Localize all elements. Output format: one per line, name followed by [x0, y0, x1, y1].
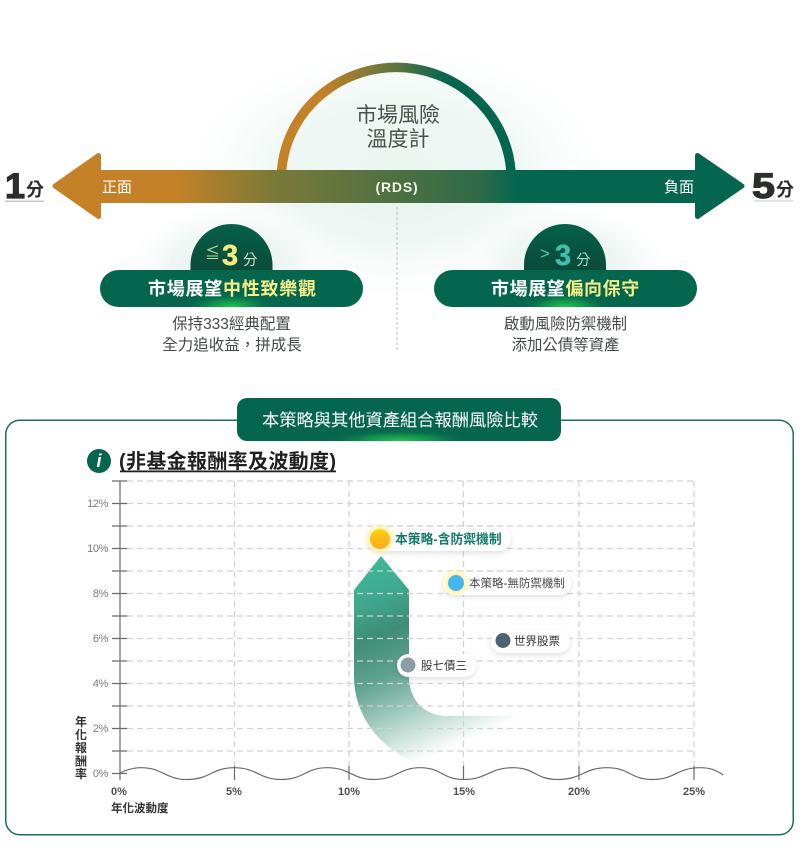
point: world equities: 世界股票 — [514, 635, 560, 648]
score: 1 point: 1 — [5, 167, 25, 206]
score: 1 point: 分 — [26, 180, 44, 200]
gauge title — [356, 104, 440, 151]
x axis labels — [111, 786, 705, 798]
x axis labels: 20% — [568, 786, 590, 798]
y axis title — [75, 714, 87, 781]
pill heading: 市場展望偏向保守 — [491, 278, 640, 299]
y axis title: 率 — [75, 766, 87, 781]
description: 添加公債等資產 — [512, 335, 619, 354]
y axis labels: 10% — [87, 543, 109, 555]
x axis wave — [120, 768, 723, 780]
gauge arc — [282, 67, 511, 172]
arrow label: positive: 正面 — [102, 179, 132, 196]
point: strategy with defense: 本策略-含防禦機制 — [395, 532, 502, 546]
y axis labels: 0% — [93, 768, 109, 780]
x axis ticks — [234, 766, 694, 780]
banner heading — [237, 398, 561, 441]
score: 5 points — [752, 167, 794, 206]
y axis labels — [87, 498, 109, 780]
panel: neutral to optimistic — [100, 224, 363, 354]
score dome: above 3: > — [540, 244, 550, 263]
arrow label: negative: 負面 — [664, 179, 694, 196]
point: strategy with defense — [363, 522, 511, 556]
center divider — [396, 207, 398, 352]
icon: info — [87, 449, 111, 473]
point: world equities — [491, 630, 570, 653]
icon: info: i — [96, 451, 102, 471]
x axis labels: 15% — [453, 786, 475, 798]
panel: comparison frame — [6, 420, 793, 835]
gauge title: 溫度計 — [366, 128, 430, 151]
chart heading: (非基金報酬率及波動度) — [119, 449, 336, 473]
big green curved arrow — [354, 556, 525, 772]
y axis labels: 8% — [93, 588, 109, 600]
score: 5 points: 分 — [776, 180, 794, 200]
background glow: gauge — [172, 37, 622, 307]
gauge title: 市場風險 — [356, 104, 440, 127]
y axis labels: 12% — [87, 498, 109, 510]
x axis labels: 25% — [683, 786, 705, 798]
y axis labels: 6% — [93, 633, 109, 645]
pill heading — [100, 270, 363, 307]
background glow: left outlook — [123, 203, 339, 327]
point: strategy without defense: 本策略-無防禦機制 — [469, 576, 565, 590]
pill heading — [434, 270, 697, 307]
score dome: above 3: 3 — [555, 240, 571, 272]
risk scale double arrow — [55, 156, 742, 216]
point: 70/30 stock bond — [397, 654, 476, 677]
panel: leaning conservative — [434, 224, 697, 354]
description: 啟動風險防禦機制 — [504, 315, 627, 333]
description: 保持333經典配置 — [172, 314, 291, 333]
y axis title: 報 — [75, 740, 87, 755]
background glow: right outlook — [457, 203, 673, 327]
point: strategy without defense — [441, 568, 571, 598]
description: 全力追收益，拼成長 — [162, 336, 302, 354]
score dome: at most 3: 分 — [243, 252, 258, 269]
y axis labels: 2% — [93, 723, 109, 735]
y axis labels: 4% — [93, 678, 109, 690]
point: 70/30 stock bond: 股七債三 — [421, 658, 467, 672]
description — [504, 315, 627, 354]
description — [162, 314, 302, 354]
arrow label: RDS: (RDS) — [376, 179, 418, 195]
score: 5 points: 5 — [752, 167, 775, 206]
x axis title: 年化波動度 — [111, 801, 169, 815]
x axis labels: 10% — [338, 786, 360, 798]
score dome: above 3: 分 — [576, 252, 591, 269]
y axis — [112, 481, 127, 780]
banner heading: 本策略與其他資產組合報酬風險比較 — [262, 410, 538, 430]
score dome: at most 3: ≦ — [205, 245, 220, 262]
score dome: at most 3: 3 — [222, 240, 238, 272]
score: 1 point — [5, 167, 44, 206]
scatter chart — [75, 481, 723, 815]
y axis title: 化 — [75, 727, 87, 742]
x axis labels: 5% — [226, 786, 242, 798]
score dome: above 3 — [524, 224, 606, 272]
y axis title: 酬 — [75, 754, 87, 768]
y axis title: 年 — [75, 714, 87, 729]
x axis labels: 0% — [111, 786, 127, 798]
pill heading: 市場展望中性致樂觀 — [148, 278, 317, 299]
score dome: at most 3 — [190, 224, 272, 272]
